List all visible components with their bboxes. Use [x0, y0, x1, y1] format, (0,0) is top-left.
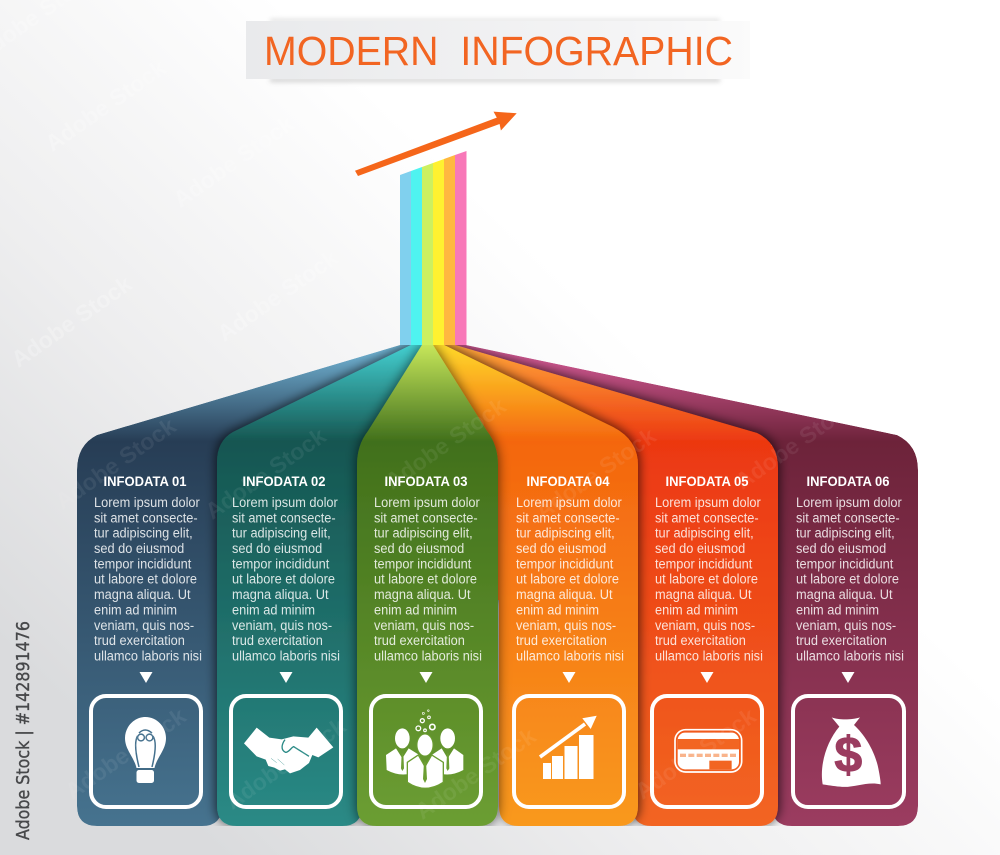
text 5: magna aliqua. Ut: [655, 587, 752, 602]
text 4: enim ad minim: [516, 602, 599, 618]
text 2: magna aliqua. Ut: [232, 587, 329, 602]
text 6: tempor incididunt: [796, 556, 894, 571]
text 3: sed do eiusmod: [374, 541, 464, 556]
panel 5: [444, 345, 778, 826]
text 2: trud exercitation: [232, 633, 323, 648]
text 4: Lorem ipsum dolor: [516, 495, 622, 510]
text 5: veniam, quis nos-: [655, 617, 755, 633]
text 5: tur adipiscing elit,: [655, 525, 754, 541]
icon frame 6: [793, 696, 904, 807]
rainbow stripes: [400, 151, 466, 346]
panel 2: [217, 345, 422, 826]
text 3: ullamco laboris nisi: [374, 648, 482, 664]
text 4: sed do eiusmod: [516, 541, 606, 556]
text 3: magna aliqua. Ut: [374, 587, 471, 602]
icon: money bag: $: [834, 727, 862, 783]
heading 3: INFODATA 03: [384, 473, 468, 489]
text 1: ut labore et dolore: [94, 571, 197, 587]
icon frame 3: [371, 696, 481, 807]
icon: handshake: [244, 728, 333, 773]
heading 6: INFODATA 06: [806, 473, 890, 489]
text 5: enim ad minim: [655, 602, 738, 618]
watermarks: Adobe Stock: [830, 124, 961, 226]
heading 1: INFODATA 01: [104, 473, 187, 489]
text 6: tur adipiscing elit,: [796, 525, 895, 541]
text 3: tempor incididunt: [374, 556, 472, 571]
text 5: tempor incididunt: [655, 556, 753, 571]
icon frame 2: [231, 696, 341, 807]
text 6: trud exercitation: [796, 633, 887, 648]
text 4: trud exercitation: [516, 633, 607, 648]
text 3: tur adipiscing elit,: [374, 525, 473, 541]
panel watermarks: Adobe Stock: [200, 422, 331, 524]
text 1: tempor incididunt: [94, 556, 192, 571]
text 2: enim ad minim: [232, 602, 315, 618]
text 6: veniam, quis nos-: [796, 617, 896, 633]
text 6: ut labore et dolore: [796, 571, 899, 587]
pointer 1: [140, 672, 152, 683]
text 5: trud exercitation: [655, 633, 746, 648]
text 6: Lorem ipsum dolor: [796, 495, 902, 510]
text 4: magna aliqua. Ut: [516, 587, 613, 602]
text 6: magna aliqua. Ut: [796, 587, 893, 602]
pointer 5: [700, 672, 714, 683]
title banner: [246, 19, 750, 82]
text 1: sit amet consecte-: [94, 510, 198, 525]
text 4: ullamco laboris nisi: [516, 648, 624, 664]
icon: money bag: [822, 717, 881, 787]
icon: light bulb: [125, 717, 166, 783]
pointer 3: [420, 672, 432, 683]
panel watermarks: [50, 392, 861, 824]
panel 1: [77, 345, 411, 826]
text 2: Lorem ipsum dolor: [232, 495, 338, 510]
panel watermarks: Adobe Stock: [60, 702, 191, 804]
text 4: veniam, quis nos-: [516, 617, 616, 633]
heading 2: INFODATA 02: [242, 473, 326, 489]
text 2: sed do eiusmod: [232, 541, 322, 556]
text 2: ut labore et dolore: [232, 571, 335, 587]
icon frame 1: [91, 696, 201, 807]
panel watermarks: Adobe Stock: [50, 412, 181, 514]
panel 6: [455, 345, 918, 826]
text 4: tur adipiscing elit,: [516, 525, 615, 541]
text 4: sit amet consecte-: [516, 510, 620, 525]
watermarks: Adobe Stock: [6, 270, 137, 372]
text 5: sed do eiusmod: [655, 541, 745, 556]
title: MODERN INFOGRAPHIC: [264, 28, 733, 74]
watermarks: Adobe Stock: [672, 274, 803, 376]
text 6: ullamco laboris nisi: [796, 648, 904, 664]
text 2: ullamco laboris nisi: [232, 648, 340, 664]
panel watermarks: Adobe Stock: [730, 392, 861, 494]
panel watermarks: Adobe Stock: [220, 712, 351, 814]
text 3: Lorem ipsum dolor: [374, 495, 480, 510]
text 1: magna aliqua. Ut: [94, 587, 191, 602]
text 4: tempor incididunt: [516, 556, 614, 571]
text 5: ullamco laboris nisi: [655, 648, 763, 664]
icon: credit card: [675, 730, 742, 772]
text 2: tur adipiscing elit,: [232, 525, 331, 541]
panel watermarks: Adobe Stock: [380, 392, 511, 494]
pointer 4: [562, 672, 576, 683]
text 3: trud exercitation: [374, 633, 465, 648]
text 2: veniam, quis nos-: [232, 617, 332, 633]
text 3: ut labore et dolore: [374, 571, 477, 587]
text 1: tur adipiscing elit,: [94, 525, 193, 541]
watermarks: Adobe Stock: [545, 244, 676, 346]
text 1: veniam, quis nos-: [94, 617, 194, 633]
stock id label: Adobe Stock | #142891476: [14, 621, 34, 840]
panel watermarks: Adobe Stock: [630, 702, 761, 804]
heading 4: INFODATA 04: [526, 473, 610, 489]
panels: [77, 345, 918, 826]
text 3: enim ad minim: [374, 602, 457, 618]
watermarks: Adobe Stock: [40, 54, 171, 156]
watermarks: Adobe Stock: [168, 110, 299, 212]
watermarks: [0, 0, 1000, 376]
pointer 2: [280, 672, 292, 683]
arrow: [355, 112, 517, 176]
text 1: sed do eiusmod: [94, 541, 184, 556]
text 1: trud exercitation: [94, 633, 185, 648]
watermarks: Adobe Stock: [702, 87, 833, 189]
text 5: ut labore et dolore: [655, 571, 758, 587]
text 4: ut labore et dolore: [516, 571, 619, 587]
icon: growth chart: [540, 716, 597, 779]
pointer 6: [842, 672, 854, 683]
watermarks: Adobe Stock: [498, 120, 629, 222]
text 6: sed do eiusmod: [796, 541, 886, 556]
text 1: enim ad minim: [94, 602, 177, 618]
text 2: sit amet consecte-: [232, 510, 336, 525]
icon frame 5: [652, 696, 762, 807]
text 3: veniam, quis nos-: [374, 617, 474, 633]
panel 3: [357, 345, 498, 826]
text 6: enim ad minim: [796, 602, 879, 618]
text 5: Lorem ipsum dolor: [655, 495, 761, 510]
icon: team with gears: [386, 710, 463, 788]
panel watermarks: Adobe Stock: [410, 722, 541, 824]
panel 4: [433, 345, 638, 826]
text 6: sit amet consecte-: [796, 510, 900, 525]
text 5: sit amet consecte-: [655, 510, 759, 525]
text 2: tempor incididunt: [232, 556, 330, 571]
panel watermarks: Adobe Stock: [530, 422, 661, 524]
text 1: Lorem ipsum dolor: [94, 495, 200, 510]
icon frame 4: [514, 696, 624, 807]
text 1: ullamco laboris nisi: [94, 648, 202, 664]
watermarks: Adobe Stock: [212, 244, 343, 346]
heading 5: INFODATA 05: [666, 473, 749, 489]
text 3: sit amet consecte-: [374, 510, 478, 525]
